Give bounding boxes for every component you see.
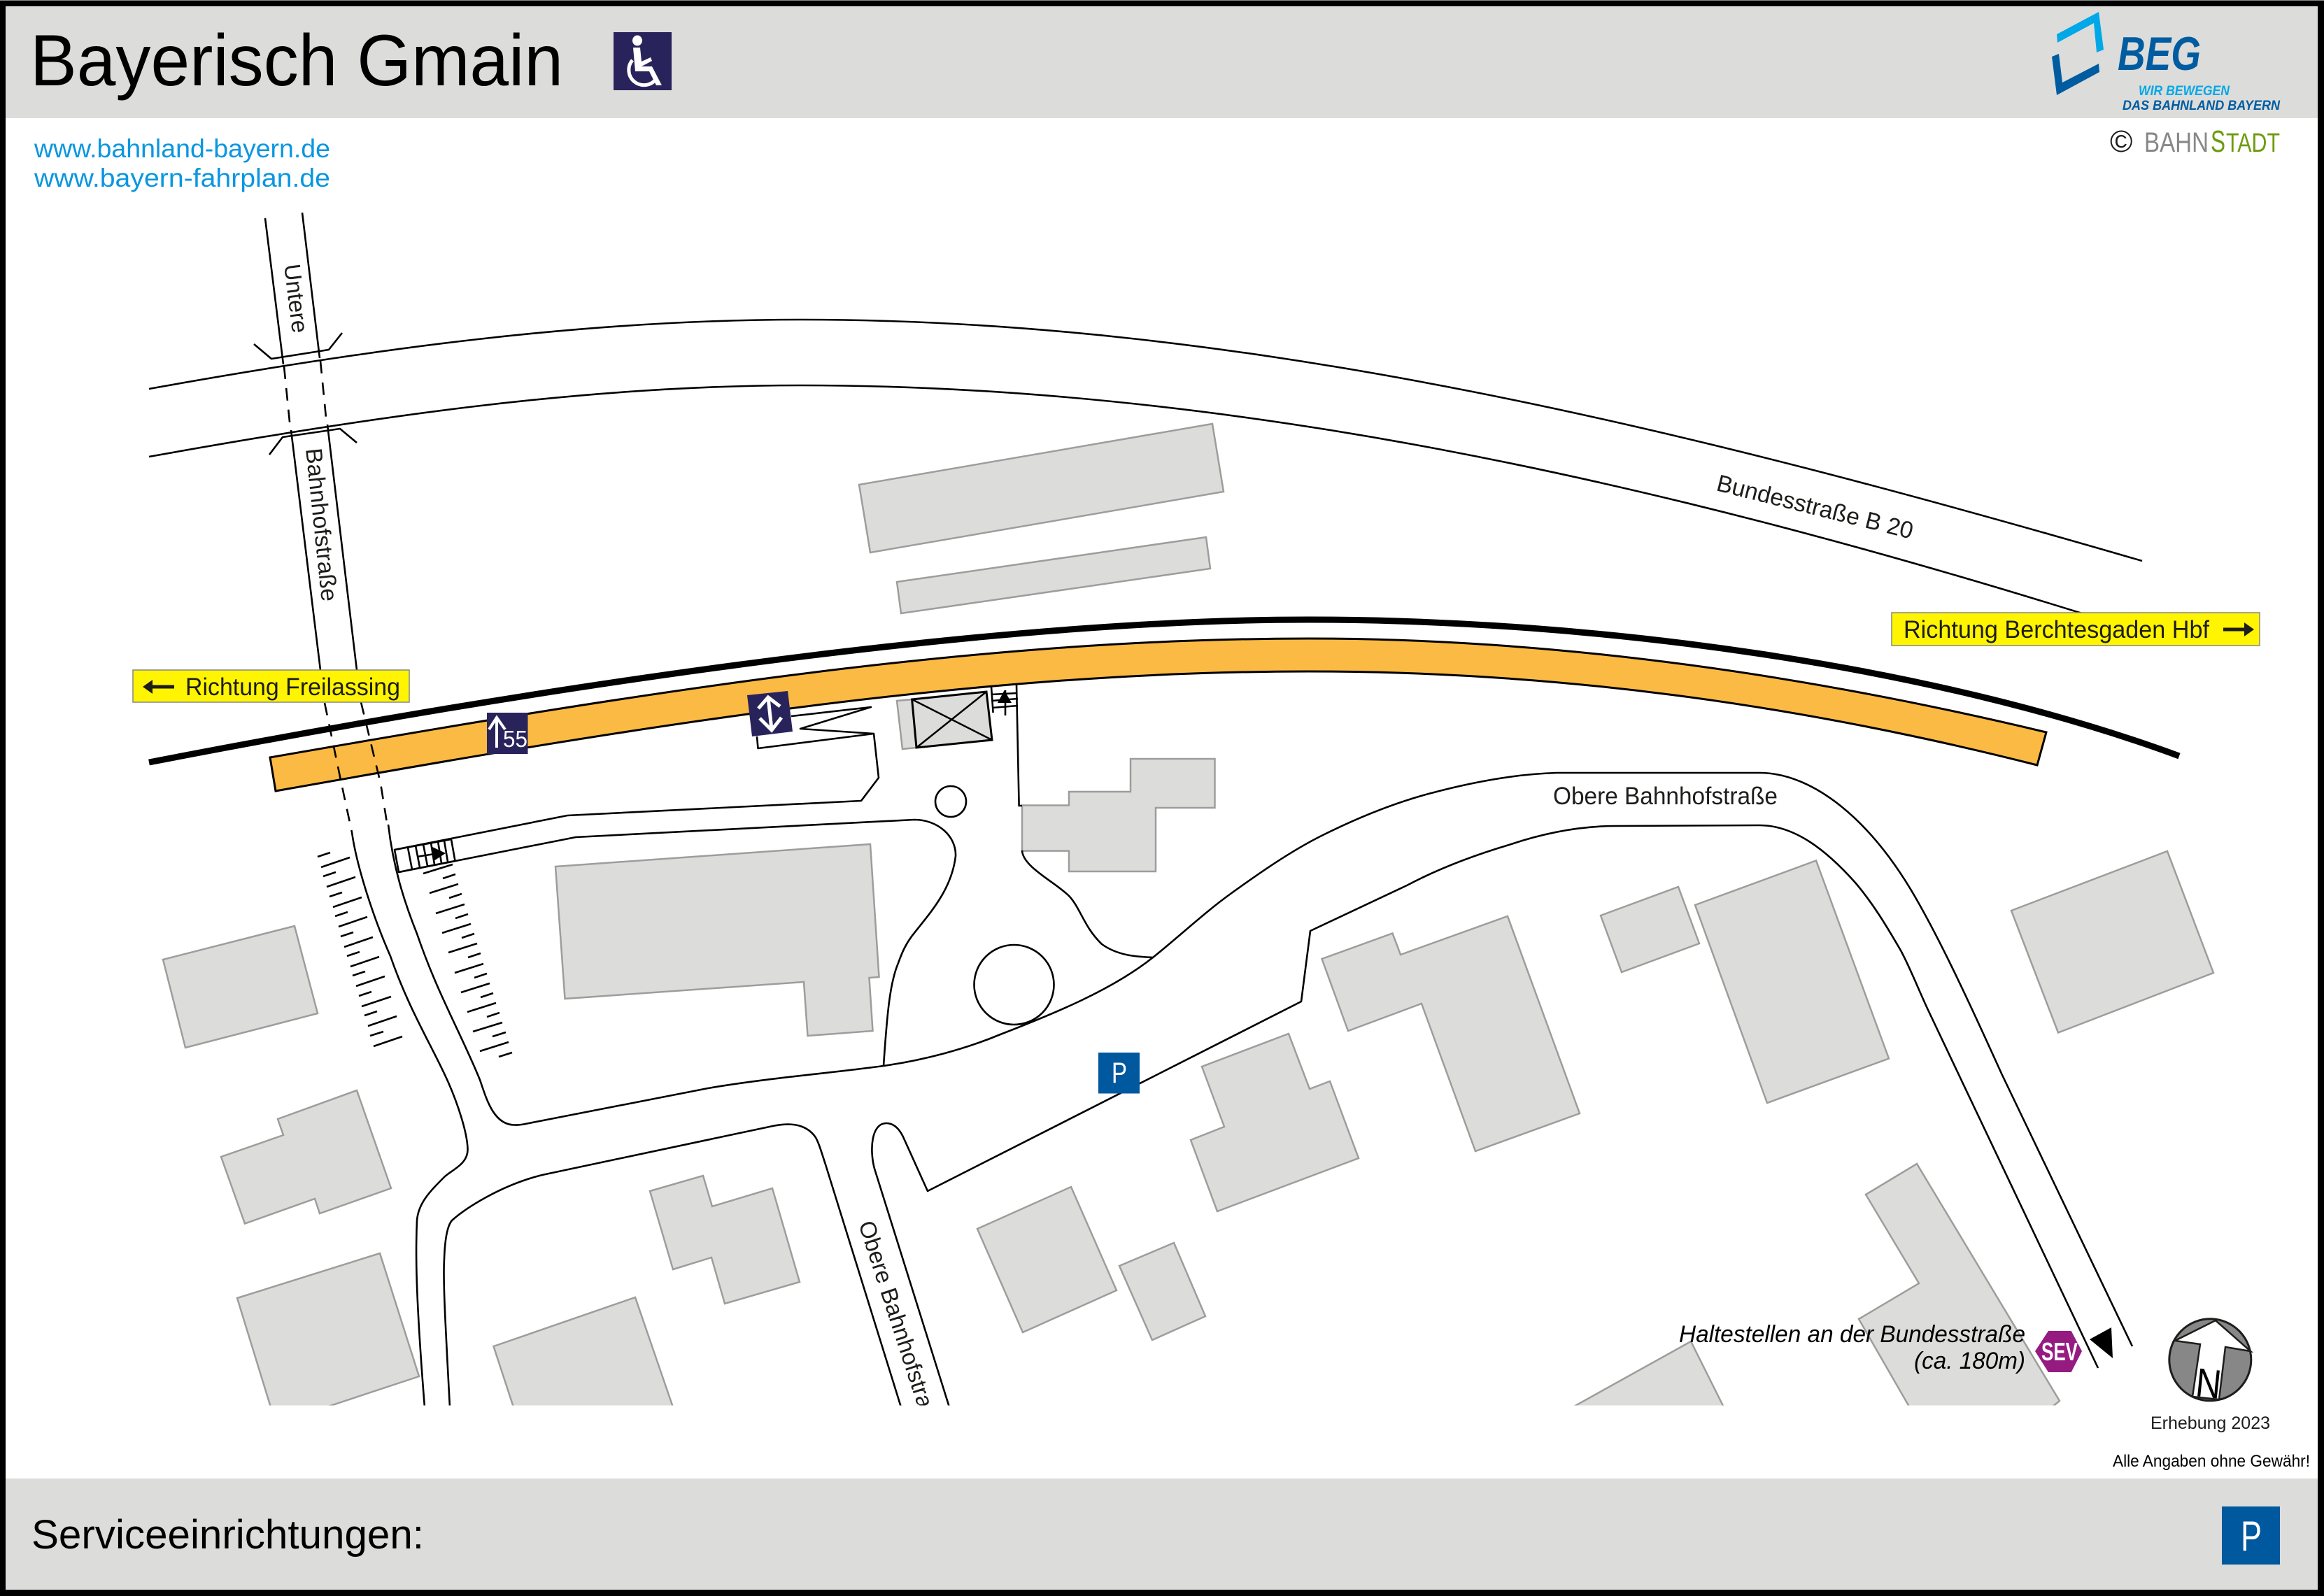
road label: Bahnhofstraße: Bahnhofstraße bbox=[301, 447, 343, 603]
copyright BahnStadt: S bbox=[2211, 124, 2225, 159]
icon: north arrow: N bbox=[2194, 1360, 2223, 1408]
railway track bbox=[149, 620, 2179, 762]
bus stops note: (ca. 180m) bbox=[1914, 1348, 2025, 1374]
road: Obere Bahnhofstraße north edge bbox=[388, 773, 2132, 1346]
logo: BEG bbox=[2052, 12, 2281, 113]
road: Obere Bahnhofstraße south edge bbox=[872, 825, 2098, 1407]
footer heading: Serviceeinrichtungen: bbox=[31, 1512, 424, 1558]
icon: north arrow bbox=[2169, 1319, 2251, 1408]
disclaimer: Alle Angaben ohne Gewähr! bbox=[2113, 1452, 2310, 1471]
bus stops note bbox=[1679, 1321, 2025, 1374]
copyright BahnStadt: © bbox=[2110, 124, 2132, 159]
footer band bbox=[6, 1479, 2318, 1590]
copyright BahnStadt bbox=[2110, 124, 2280, 159]
icon: parking on map bbox=[1098, 1053, 1140, 1094]
logo: BEG: BEG bbox=[2118, 27, 2201, 80]
survey year: Erhebung 2023 bbox=[2151, 1413, 2270, 1433]
parking bays west bbox=[318, 853, 402, 1046]
road label: Obere Bahnhofstraße rotated: Obere Bahnhofstraße bbox=[853, 1218, 947, 1437]
icon: parking service bbox=[2222, 1506, 2280, 1565]
road label: Obere Bahnhofstraße horizontal: Obere Bahnhofstraße bbox=[1553, 783, 1778, 810]
title: Bayerisch Gmain bbox=[30, 20, 563, 101]
copyright BahnStadt: TADT bbox=[2226, 129, 2280, 158]
road: Untere Bahnhofstraße with underpass bbox=[254, 213, 357, 670]
road: west Bahnhofstraße bbox=[352, 832, 468, 1407]
header band bbox=[6, 6, 2318, 118]
copyright BahnStadt: BAHN bbox=[2144, 127, 2209, 158]
parking bays east bbox=[423, 864, 512, 1057]
icon: parking on map: P bbox=[1112, 1056, 1127, 1089]
icon: parking service: P bbox=[2241, 1513, 2262, 1560]
direction sign: Richtung Freilassing: Richtung Freilassing bbox=[185, 674, 400, 701]
road underpass under railway bbox=[325, 702, 387, 832]
icon: SEV hexagon bbox=[2035, 1331, 2082, 1372]
icon: platform access sign 55 bbox=[487, 713, 527, 754]
stairs west with arrow bbox=[395, 839, 455, 872]
logo: BEG: WIR BEWEGEN bbox=[2139, 83, 2230, 99]
road: south branch bbox=[444, 1125, 901, 1407]
direction sign: Richtung Freilassing bbox=[133, 670, 409, 702]
icon: SEV hexagon: SEV bbox=[2041, 1337, 2078, 1366]
bus stops note: Haltestellen an der Bundesstraße bbox=[1679, 1321, 2025, 1348]
platform bbox=[270, 639, 2046, 791]
website links: www.bahnland-bayern.de bbox=[34, 134, 330, 163]
icon: stop marker triangle bbox=[2090, 1327, 2113, 1358]
road: Bundesstraße B 20 bbox=[149, 320, 2142, 613]
website links: www.bayern-fahrplan.de bbox=[34, 164, 330, 192]
site map bbox=[149, 213, 2213, 1407]
elevator shaft building bbox=[897, 692, 992, 749]
stairs east with arrow bbox=[991, 687, 1018, 715]
station forecourt paths bbox=[395, 685, 1153, 1066]
icon: wheelchair accessible bbox=[614, 32, 672, 90]
logo: BEG: DAS BAHNLAND BAYERN bbox=[2123, 98, 2281, 113]
road label: Untere: Untere bbox=[279, 262, 313, 334]
direction sign: Richtung Berchtesgaden Hbf: Richtung Berchtesgaden Hbf bbox=[1904, 616, 2209, 643]
icon: platform access sign 55: 55 bbox=[503, 726, 527, 752]
road label: Bundesstraße B 20: Bundesstraße B 20 bbox=[1714, 470, 1916, 544]
roundabout circles bbox=[935, 786, 1054, 1025]
website links bbox=[34, 134, 330, 192]
buildings bbox=[163, 424, 2213, 1407]
icon: elevator bbox=[747, 691, 793, 736]
